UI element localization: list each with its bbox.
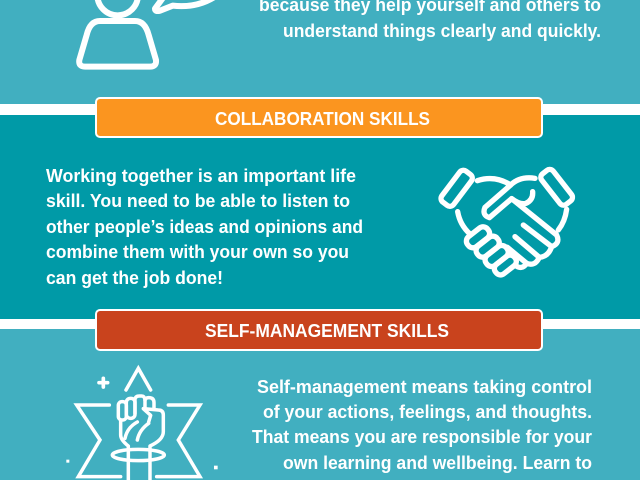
text: self-management description: Self-management means taking control [257, 377, 592, 397]
heading: self-management skills: SELF-MANAGEMENT SKILLS [205, 321, 449, 341]
text: self-management description: own learning and wellbeing. Learn to [283, 453, 592, 473]
text: collaboration description [46, 166, 363, 288]
icon: handshake [439, 168, 574, 277]
text: collaboration description: Working together is an important life [46, 166, 356, 186]
text: self-management description: That means you are responsible for your [252, 427, 592, 447]
panel: self-management background [0, 329, 640, 480]
text: self-management description: of your actions, feelings, and thoughts. [263, 402, 592, 422]
text: collaboration description: can get the job done! [46, 268, 223, 288]
text: communication description: understand things clearly and quickly. [283, 21, 601, 41]
heading: collaboration skills [96, 98, 542, 137]
heading: collaboration skills: COLLABORATION SKILLS [215, 109, 430, 129]
panel: collaboration background [0, 104, 640, 329]
icon: raised fist in star [66, 368, 218, 480]
icon: person with speech bubble [79, 0, 215, 67]
text: self-management description [252, 377, 592, 473]
text: communication description [259, 0, 601, 41]
panel: communication skills background [0, 0, 640, 104]
text: collaboration description: other people’s ideas and opinions and [46, 217, 363, 237]
text: collaboration description: combine them with your own so you [46, 242, 349, 262]
text: collaboration description: skill. You need to be able to listen to [46, 191, 350, 211]
heading: self-management skills [96, 310, 542, 350]
